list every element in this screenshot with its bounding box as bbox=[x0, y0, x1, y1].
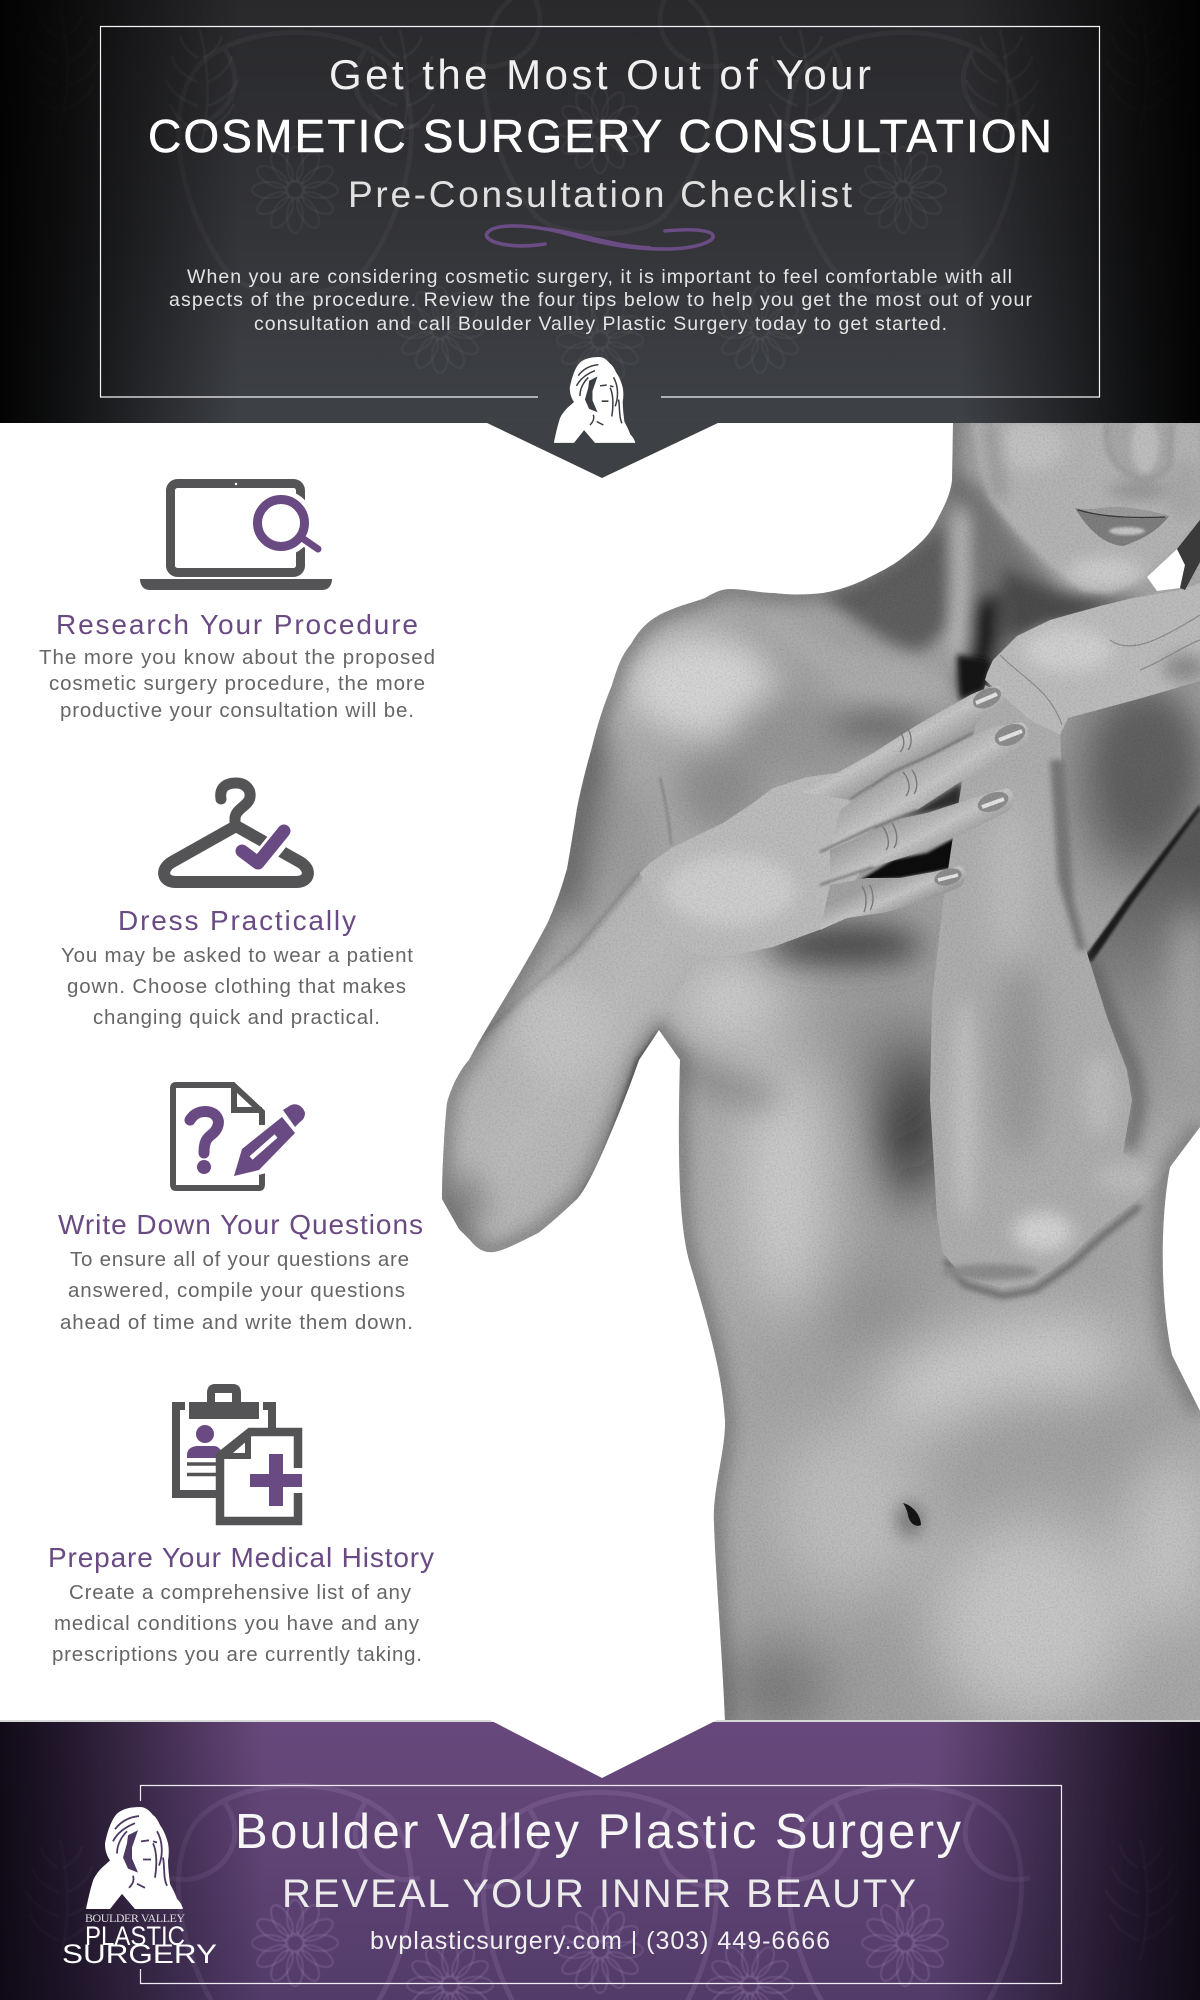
description bbox=[60, 1248, 413, 1334]
logo word plastic: PLASTIC bbox=[85, 1921, 185, 1951]
logo small caption: BOULDER VALLEY bbox=[85, 1911, 185, 1925]
footer notch bbox=[488, 1719, 719, 1778]
icon: laptop with magnifier bbox=[140, 483, 332, 590]
fingernails bbox=[932, 683, 1029, 889]
nose highlight bbox=[1131, 417, 1159, 473]
description: Create a comprehensive list of any bbox=[69, 1581, 412, 1604]
finger dividers bbox=[820, 733, 973, 885]
header frame bbox=[100, 26, 1100, 397]
intro paragraph: aspects of the procedure. Review the four tips below to help you get the most out of your bbox=[169, 289, 1032, 311]
footer contact: bvplasticsurgery.com | (303) 449-6666 bbox=[370, 1927, 830, 1955]
header arrow bbox=[485, 422, 720, 478]
icon: header portrait logo bbox=[554, 357, 635, 443]
description bbox=[61, 944, 413, 1029]
torso tones bbox=[675, 680, 1200, 1735]
footer panel bbox=[0, 1719, 1200, 2000]
icon: footer portrait bbox=[86, 1807, 183, 1909]
intro paragraph: When you are considering cosmetic surgery, it is important to feel comfortable with all bbox=[187, 266, 1012, 288]
little finger bbox=[820, 866, 965, 930]
description: prescriptions you are currently taking. bbox=[52, 1643, 422, 1666]
title line 1: Get the Most Out of Your bbox=[329, 51, 871, 98]
description: ahead of time and write them down. bbox=[60, 1311, 413, 1334]
description: answered, compile your questions bbox=[68, 1279, 405, 1302]
icon: hanger with check mark bbox=[164, 783, 308, 882]
silhouette rim shading bbox=[442, 400, 1200, 1760]
dark hair at right bbox=[1177, 520, 1200, 590]
header panel bbox=[0, 0, 1200, 478]
icon: clipboard and medical document bbox=[176, 1384, 304, 1521]
item 3: write down your questions bbox=[58, 1085, 423, 1334]
shadow under elbow bbox=[945, 1206, 1140, 1296]
footer heading: Boulder Valley Plastic Surgery bbox=[235, 1805, 962, 1859]
footer logo bbox=[62, 1807, 217, 1969]
face shading bbox=[985, 420, 1200, 586]
description: gown. Choose clothing that makes bbox=[67, 975, 406, 998]
heading: Research Your Procedure bbox=[56, 609, 418, 640]
navel bbox=[896, 1502, 924, 1538]
description bbox=[39, 646, 435, 722]
knuckle creases bbox=[862, 726, 917, 912]
logo word surgery: SURGERY bbox=[62, 1939, 217, 1969]
intro paragraph: consultation and call Boulder Valley Plastic Surgery today to get started. bbox=[254, 313, 947, 335]
description: To ensure all of your questions are bbox=[70, 1248, 409, 1271]
upper right arm bbox=[1086, 804, 1200, 1166]
right wrist and hand bbox=[985, 583, 1200, 735]
description: cosmetic surgery procedure, the more bbox=[49, 672, 425, 695]
neck and collarbone bbox=[805, 470, 1144, 701]
face bbox=[972, 423, 1200, 593]
left hand bbox=[640, 685, 1028, 956]
chest and shoulder tones bbox=[560, 635, 1190, 1105]
description: You may be asked to wear a patient bbox=[61, 944, 413, 967]
armpit crease bbox=[660, 777, 671, 845]
photo: woman's torso bbox=[430, 400, 1200, 1760]
heading: Dress Practically bbox=[118, 905, 356, 936]
description bbox=[52, 1581, 422, 1666]
footer top line bbox=[0, 1720, 1200, 1722]
header lace pattern bbox=[26, 0, 1178, 383]
nose bbox=[1106, 423, 1172, 479]
description: medical conditions you have and any bbox=[54, 1612, 420, 1635]
heading: Write Down Your Questions bbox=[58, 1209, 423, 1240]
item 1: research your procedure bbox=[39, 483, 435, 722]
index finger bbox=[800, 685, 1004, 800]
description: changing quick and practical. bbox=[93, 1006, 380, 1029]
footer frame bbox=[140, 1786, 1062, 1984]
left forearm shading bbox=[440, 873, 660, 1237]
right forearm bbox=[930, 685, 1162, 1288]
item 4: prepare your medical history bbox=[48, 1384, 434, 1666]
heading: Prepare Your Medical History bbox=[48, 1542, 434, 1573]
icon: document, question mark and pencil bbox=[173, 1085, 305, 1188]
ring finger bbox=[830, 788, 1013, 885]
footer lace pattern bbox=[26, 1786, 1178, 2000]
footer tagline: REVEAL YOUR INNER BEAUTY bbox=[282, 1872, 916, 1916]
intro paragraph bbox=[169, 266, 1032, 335]
item 2: dress practically bbox=[61, 783, 413, 1029]
icon: purple flourish bbox=[487, 226, 713, 249]
left forearm bbox=[442, 874, 685, 1252]
skin grain bbox=[430, 420, 1200, 1730]
middle finger bbox=[837, 722, 1028, 834]
title line 2: COSMETIC SURGERY CONSULTATION bbox=[148, 110, 1052, 162]
description: productive your consultation will be. bbox=[60, 699, 414, 722]
subtitle: Pre-Consultation Checklist bbox=[348, 174, 853, 215]
lips bbox=[1075, 507, 1169, 546]
gap under chin bbox=[1147, 549, 1185, 591]
gap behind fingers bbox=[860, 655, 990, 880]
description: The more you know about the proposed bbox=[39, 646, 435, 669]
